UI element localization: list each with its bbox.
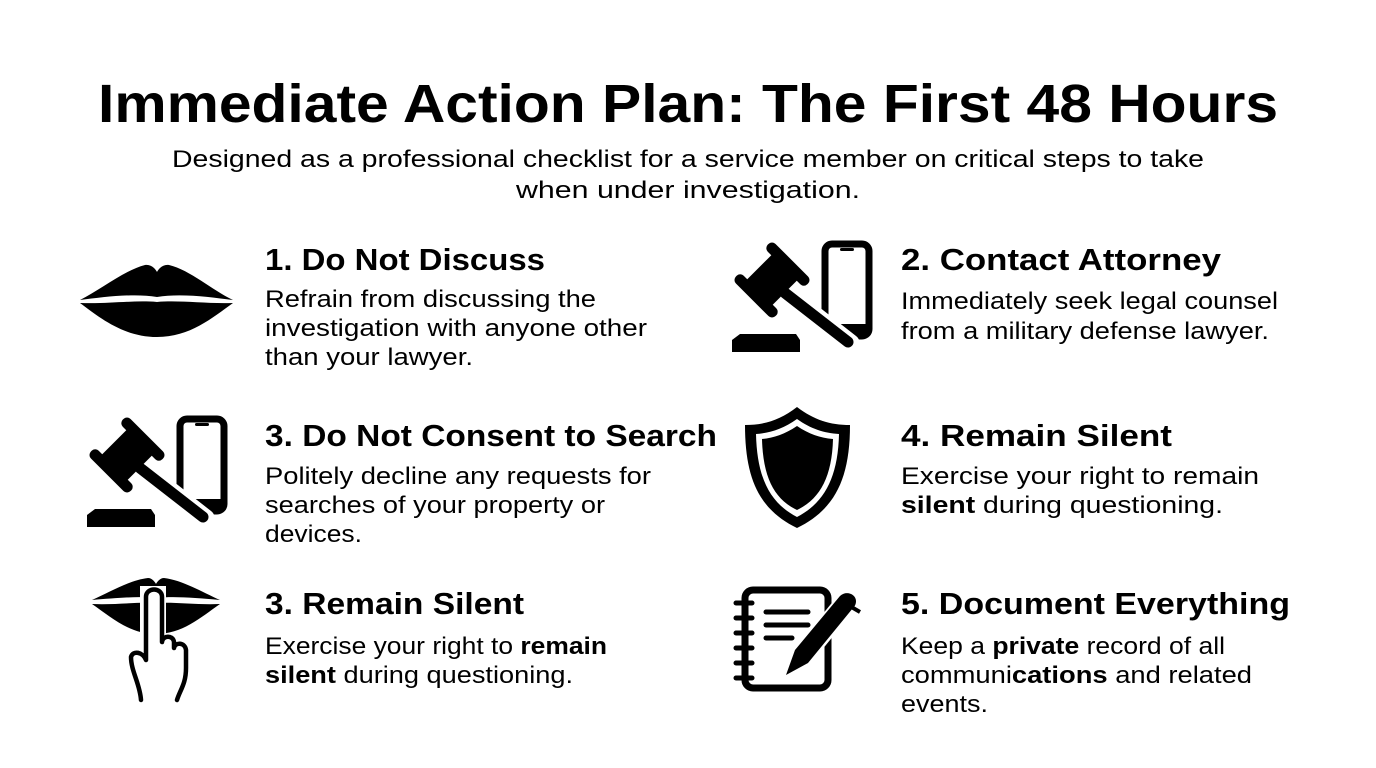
panel: 4 remain silent: 4. Remain Silent	[901, 418, 1172, 453]
panel: 1 do not discuss: than your lawyer.	[265, 344, 473, 371]
panel: 2 contact attorney: from a military defense lawyer.	[901, 318, 1269, 345]
title: Immediate Action Plan: The First 48 Hours	[98, 74, 1278, 134]
icon: notebook and pen	[736, 590, 860, 688]
panel: 3 remain silent: Exercise your right to remain	[265, 633, 607, 660]
panel: 4 remain silent: silent during questioning.	[901, 492, 1223, 519]
icon: lips	[80, 265, 233, 337]
panel: 2 contact attorney	[901, 242, 1278, 345]
subtitle	[172, 146, 1204, 204]
panel: 5 document everything	[901, 586, 1290, 718]
panel: 4 remain silent	[901, 418, 1259, 519]
icon: gavel and phone (attorney)	[732, 240, 869, 352]
icon: finger on lips	[92, 578, 220, 700]
panel: 3 do not consent to search: Politely decline any requests for	[265, 463, 651, 490]
panel: 3 do not consent to search: 3. Do Not Consent to Search	[265, 418, 717, 453]
panel: 3 remain silent	[265, 586, 607, 689]
panel: 5 document everything: Keep a private record of all	[901, 633, 1225, 660]
panel: 4 remain silent: Exercise your right to remain	[901, 463, 1259, 490]
panel: 5 document everything: 5. Document Everything	[901, 586, 1290, 621]
icon: shield	[745, 407, 850, 528]
panel: 1 do not discuss: investigation with anyone other	[265, 315, 647, 342]
panel: 5 document everything: events.	[901, 691, 988, 718]
panel: 1 do not discuss: Refrain from discussing the	[265, 286, 596, 313]
subtitle: Designed as a professional checklist for a service member on critical steps to take	[172, 146, 1204, 173]
panel: 2 contact attorney: Immediately seek legal counsel	[901, 288, 1278, 315]
panel: 3 do not consent to search	[265, 418, 717, 548]
panel: 5 document everything: communi cations and related	[901, 662, 1252, 689]
panel: 3 remain silent: silent during questioning.	[265, 662, 573, 689]
panel: 1 do not discuss	[265, 242, 647, 371]
panel: 3 do not consent to search: searches of your property or	[265, 492, 605, 519]
panel: 1 do not discuss: 1. Do Not Discuss	[265, 242, 545, 277]
subtitle: when under investigation.	[515, 177, 860, 204]
panel: 3 do not consent to search: devices.	[265, 521, 362, 548]
icon: gavel and phone (search)	[87, 415, 224, 527]
panel: 3 remain silent: 3. Remain Silent	[265, 586, 524, 621]
panel: 2 contact attorney: 2. Contact Attorney	[901, 242, 1222, 277]
